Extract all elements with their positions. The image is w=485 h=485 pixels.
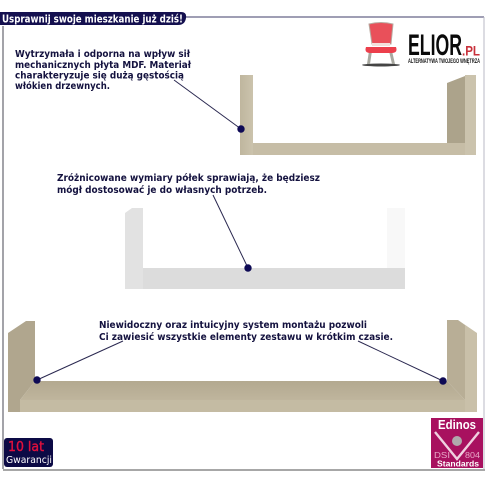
text block: material: mechanicznych płyta MDF. Materiał (15, 60, 191, 71)
text block: mounting: Ci zawiesić wszystkie elementy zestawu w krótkim czasie. (99, 331, 393, 343)
text block: material (15, 49, 191, 92)
text block: dimensions: mógł dostosować je do własnych potrzeb. (57, 184, 267, 196)
shelf: oak bottom (8, 320, 477, 412)
badge: Edinos standards: Edinos (438, 417, 476, 432)
text block: mounting: Niewidoczny oraz intuicyjny system montażu pozwoli (99, 320, 367, 331)
badge: 10 years warranty: 10 lat (8, 440, 44, 455)
badge: 10 years warranty: Gwarancji (6, 455, 52, 466)
callout: mounting pointer right (358, 341, 447, 385)
shelf: white middle (125, 208, 405, 289)
text block: material: włókien drzewnych. (15, 80, 110, 92)
text block: dimensions (57, 172, 320, 196)
badge: Edinos standards: Standards (437, 460, 480, 468)
badge: Edinos standards (431, 417, 483, 468)
badge: Edinos standards: 804 (465, 451, 481, 460)
badge: 10 years warranty (4, 438, 53, 467)
callout: mounting pointer left (33, 341, 123, 384)
text block: dimensions: Zróżnicowane wymiary półek sprawiają, że będziesz (57, 172, 320, 184)
logo: Elior (362, 22, 480, 66)
text block: material: Wytrzymała i odporna na wpływ sił (15, 49, 190, 60)
icon: red chair (362, 22, 400, 66)
text block: material: charakteryzuje się dużą gęstością (15, 70, 184, 82)
shelf: oak top right (240, 75, 476, 155)
wordmark suffix: .PL (462, 42, 480, 58)
header banner: Usprawnij swoje mieszkanie już dziś! (2, 12, 183, 26)
callout: material pointer (174, 80, 245, 133)
badge: Edinos standards: DSI (434, 451, 450, 460)
text block: mounting (99, 320, 393, 343)
callout: dimensions pointer (213, 195, 252, 272)
